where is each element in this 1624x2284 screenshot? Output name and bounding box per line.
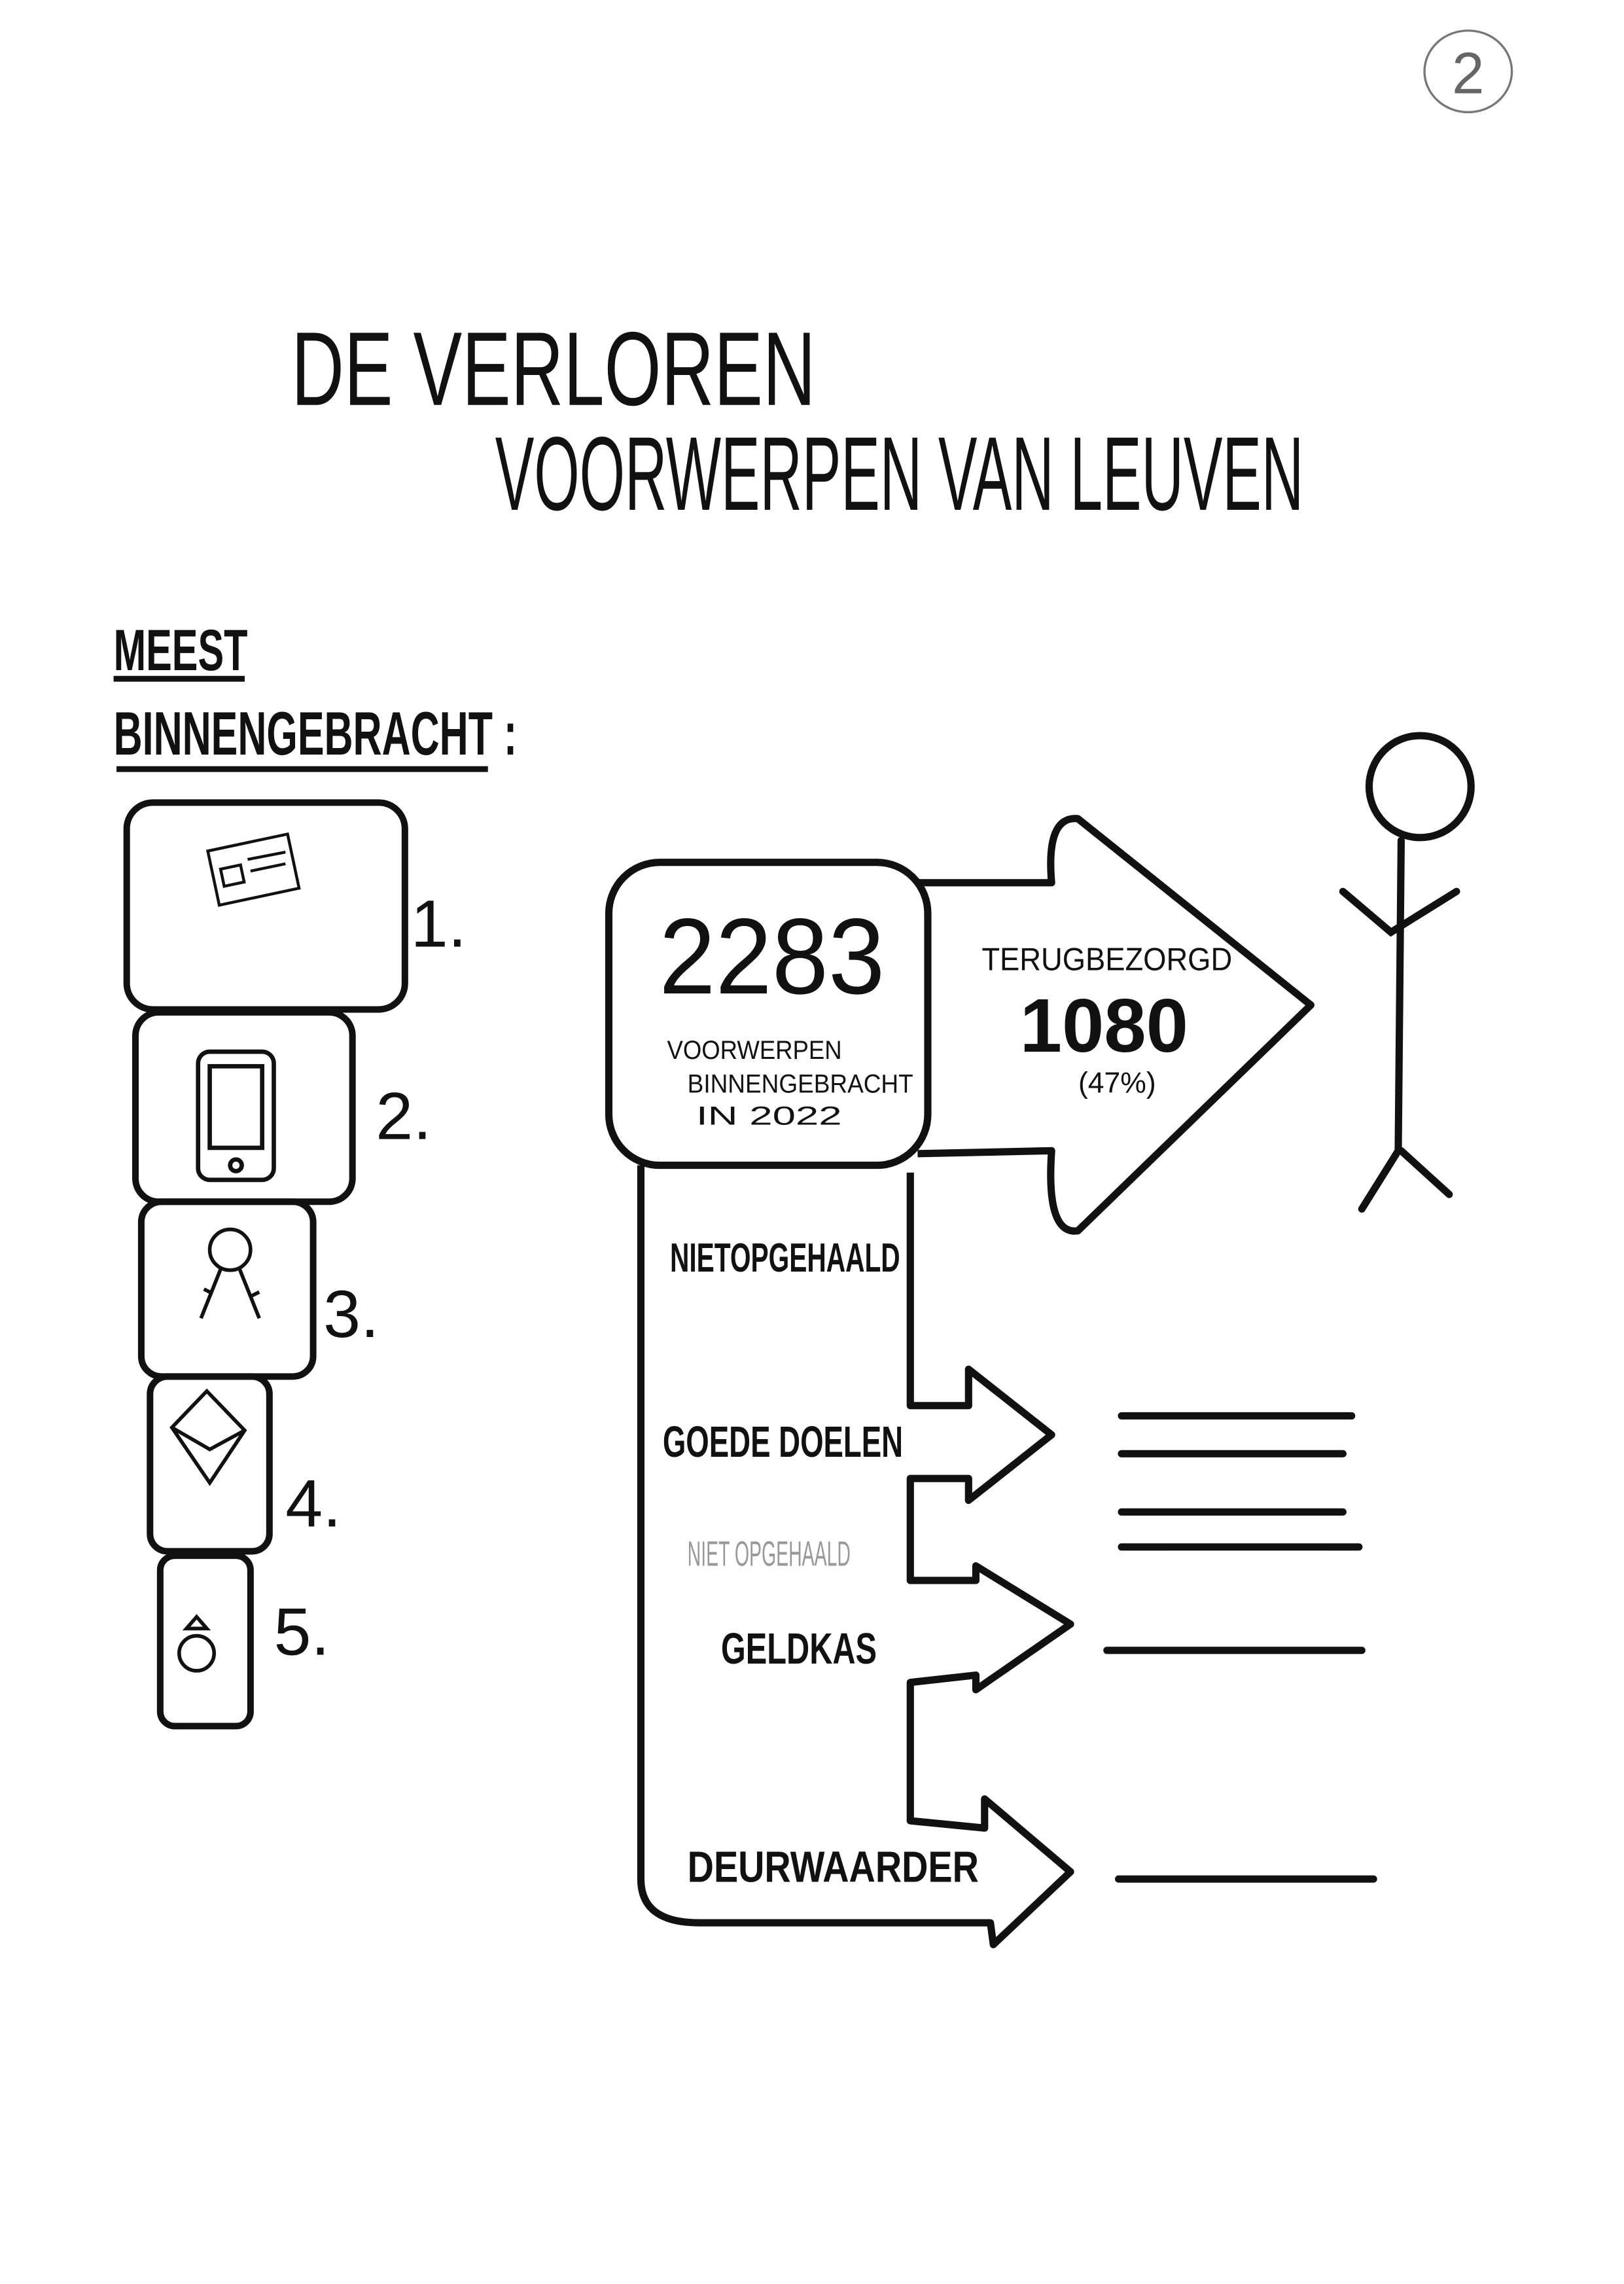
rank numbers: 5. <box>274 1594 330 1669</box>
rank numbers: 3. <box>323 1276 380 1351</box>
heading: meest binnengebracht <box>114 617 517 769</box>
title: DE VERLOREN <box>291 310 816 427</box>
total box <box>609 863 928 1166</box>
stick figure <box>1343 736 1471 1209</box>
title <box>291 310 1303 532</box>
page number <box>1424 31 1512 112</box>
ranked stack of items <box>127 802 405 1726</box>
total box: BINNENGEBRACHT <box>688 1069 913 1098</box>
total box: IN 2022 <box>696 1101 842 1130</box>
heading: meest binnengebracht: BINNENGEBRACHT : <box>114 699 517 768</box>
arrow: terugbezorgd: 1080 <box>1020 983 1188 1068</box>
flow column <box>641 1166 1070 1944</box>
rank numbers <box>274 886 467 1669</box>
item 2: phone <box>135 1012 353 1202</box>
heading: meest binnengebracht: MEEST <box>114 617 247 683</box>
item 4: wallet <box>150 1376 270 1551</box>
item 3: keys <box>141 1202 313 1376</box>
total box: 2283 <box>659 896 885 1016</box>
item 5: ring <box>160 1556 251 1726</box>
rank numbers: 1. <box>411 886 467 961</box>
label: geldkas: GELDKAS <box>721 1625 877 1673</box>
arrow: terugbezorgd <box>917 819 1311 1231</box>
blank value lines <box>1107 1416 1373 1879</box>
label: goede doelen: GOEDE DOELEN <box>663 1418 903 1467</box>
crossed-out note: NIET OPGEHAALD <box>688 1535 851 1574</box>
arrow: terugbezorgd: TERUGBEZORGD <box>981 942 1232 977</box>
label: niet opgehaald: NIETOPGEHAALD <box>670 1236 900 1281</box>
total box: VOORWERPEN <box>667 1036 842 1065</box>
page number: 2 <box>1452 40 1485 105</box>
rank numbers: 2. <box>376 1079 432 1154</box>
item 1: ID card <box>127 802 405 1009</box>
arrow: terugbezorgd: (47%) <box>1078 1067 1156 1099</box>
rank numbers: 4. <box>285 1466 342 1541</box>
label: deurwaarder: DEURWAARDER <box>688 1844 979 1892</box>
